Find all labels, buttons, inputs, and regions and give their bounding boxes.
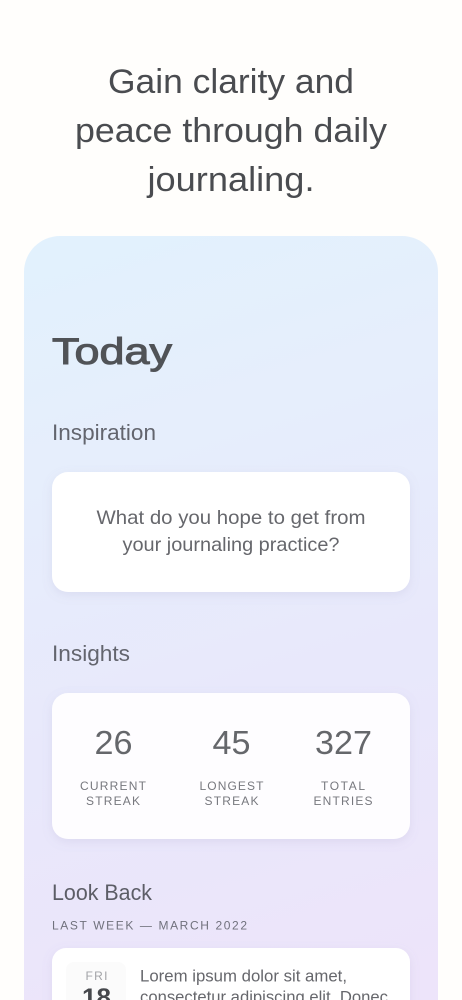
stat: current streak: STREAK [86, 794, 140, 808]
prompt text: your journaling practice? [122, 534, 340, 556]
heading: Today: Today [52, 331, 173, 372]
entry text: Lorem ipsum dolor sit amet, [140, 968, 347, 986]
card: inspiration prompt [52, 472, 410, 592]
stat: total entries: ENTRIES [314, 794, 372, 808]
stat: total entries: TOTAL [321, 779, 365, 793]
stat: longest streak: 45 [212, 724, 250, 761]
date badge: FRI [86, 969, 108, 983]
date badge [66, 962, 126, 1000]
subheading: last week: LAST WEEK — MARCH 2022 [52, 918, 247, 932]
stat: current streak: 26 [94, 724, 132, 761]
stat: longest streak [200, 724, 264, 808]
stat: longest streak: STREAK [204, 794, 258, 808]
title: journaling. [146, 161, 314, 199]
entry text [140, 968, 388, 1000]
title [75, 63, 387, 199]
stat: longest streak: LONGEST [200, 779, 264, 793]
stat: current streak [80, 724, 147, 808]
panel: today screen [24, 236, 438, 1000]
heading: Insights: Insights [52, 641, 130, 666]
stat: total entries [314, 724, 372, 808]
title: peace through daily [75, 112, 387, 150]
heading: Look Back: Look Back [52, 880, 153, 905]
title: Gain clarity and [108, 63, 354, 101]
stat: current streak: CURRENT [80, 779, 147, 793]
card: insights stats [52, 693, 410, 839]
prompt text: What do you hope to get from [96, 507, 366, 529]
prompt text [96, 507, 366, 556]
card: journal entry [52, 948, 410, 1000]
stat: total entries: 327 [315, 724, 372, 761]
heading: Inspiration: Inspiration [52, 420, 156, 445]
